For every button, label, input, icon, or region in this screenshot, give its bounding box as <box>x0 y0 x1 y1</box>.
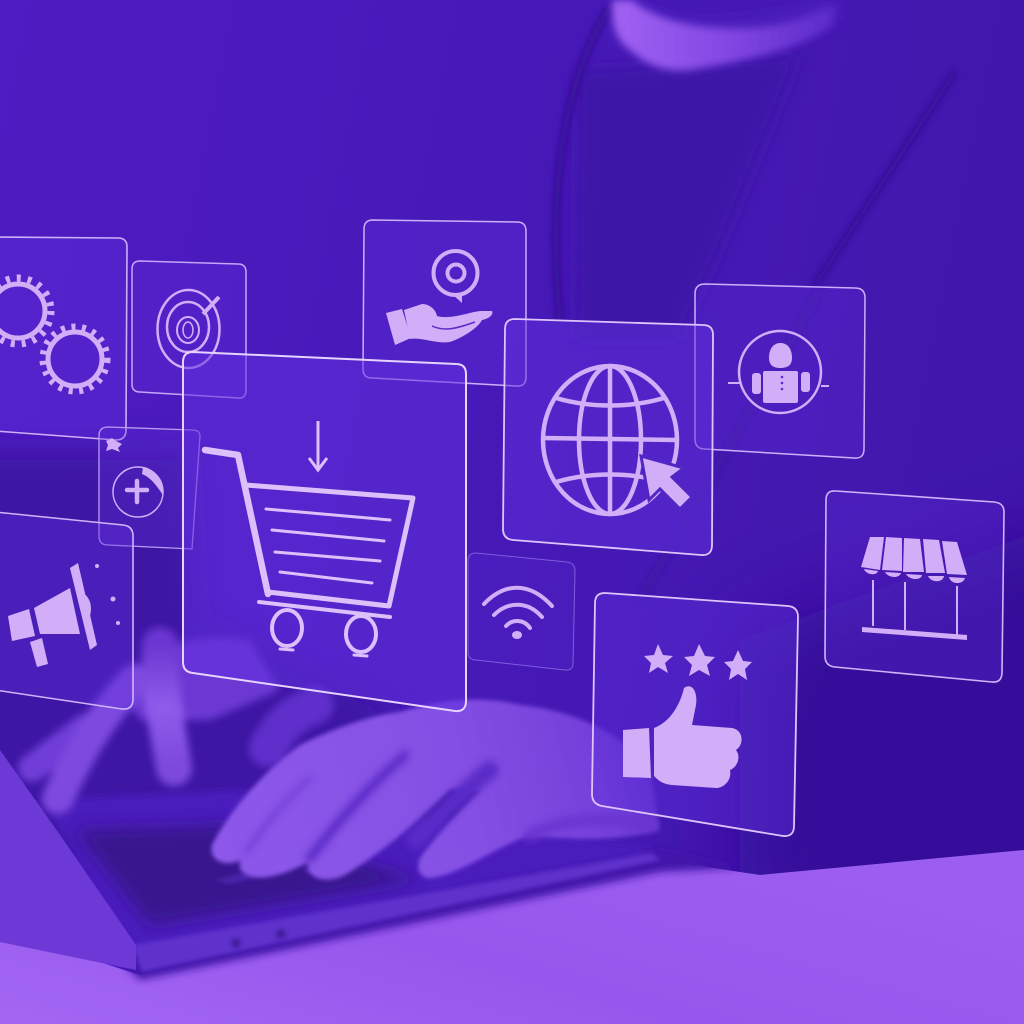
icon: down arrow <box>309 421 327 470</box>
table surface <box>0 850 1024 1024</box>
panel: gears <box>0 237 127 440</box>
icon: three stars <box>644 644 752 680</box>
panel: hand with location pin <box>363 220 526 386</box>
panel: megaphone <box>0 512 133 709</box>
panel: plus badge <box>99 427 200 549</box>
icon: location pin <box>434 251 478 303</box>
panel: store <box>825 491 1004 682</box>
icon: gears <box>0 278 107 391</box>
right hand <box>211 700 660 880</box>
panel: like and rating <box>592 593 798 836</box>
icon: open hand <box>386 304 492 345</box>
icon: cart <box>205 450 413 656</box>
icon: plus circle <box>113 467 163 517</box>
panel: person <box>695 284 865 458</box>
hands on keyboard <box>32 637 660 880</box>
panel: shopping cart <box>183 352 466 711</box>
icon: small star mark <box>106 438 122 452</box>
icon: storefront <box>861 537 967 640</box>
left hand <box>32 637 315 798</box>
panel: globe <box>503 319 713 555</box>
panel: wifi <box>468 553 575 670</box>
icon: wifi <box>484 588 552 639</box>
panel: target <box>132 261 246 398</box>
icon: thumbs up <box>623 686 742 788</box>
laptop <box>0 750 740 980</box>
icon: megaphone <box>8 563 120 667</box>
icon: person in circle <box>728 331 829 413</box>
icon: target <box>158 290 220 368</box>
icon: globe with cursor <box>543 366 692 514</box>
